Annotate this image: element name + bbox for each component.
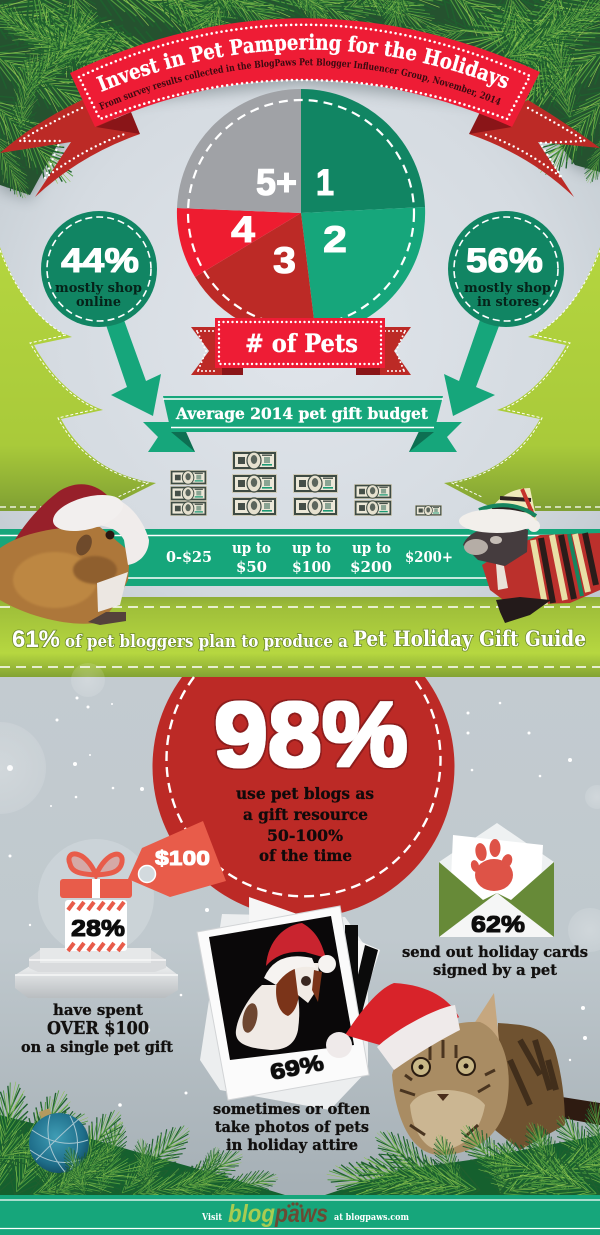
photo stack: 69%: 69% [268, 1050, 326, 1085]
banner: average budget: Average 2014 pet gift budget [175, 404, 428, 423]
banner: number of pets: # of Pets [245, 329, 358, 358]
sweater [482, 533, 600, 605]
pedestal [15, 948, 178, 998]
footer band: at blogpaws.com [334, 1213, 409, 1223]
big circle: 98% pet blogs: 50-100% [267, 826, 343, 845]
money up to $100 [293, 474, 338, 516]
ribbon tails [0, 100, 600, 197]
pie labels: 3 [273, 240, 296, 281]
lower background [0, 677, 600, 1197]
callout: 44% online [41, 211, 157, 327]
pie labels [231, 162, 347, 281]
ornament [29, 1108, 122, 1205]
budget band: $200+ [405, 548, 453, 566]
green tree left [0, 247, 156, 511]
slice: 2 pets [301, 207, 425, 336]
budget band: $200 [350, 558, 392, 576]
pie labels: 4 [231, 209, 255, 250]
logo: blogpaws [228, 1200, 328, 1228]
ferret in sweater [459, 488, 600, 623]
budget band: up to [352, 539, 391, 557]
budget band: $100 [292, 558, 331, 576]
callout: 44% online: mostly shop [55, 281, 142, 296]
subtitle: From survey results collected in the BlogPaws Pet Blogger Influencer Group, November, 2014 [98, 58, 501, 110]
gift guide band: 61% [12, 626, 60, 653]
banner: average budget [143, 396, 462, 452]
budget band: up to [232, 539, 271, 557]
footer band: Visit [201, 1213, 222, 1223]
legs [496, 597, 551, 623]
footer band [0, 1195, 600, 1235]
callout: 56% in stores: in stores [477, 295, 539, 310]
slice: 4 pets [177, 208, 301, 277]
bottom pine right [323, 1099, 600, 1216]
dog in santa hat [236, 923, 336, 1050]
big circle: 98% pet blogs [152, 677, 454, 918]
big circle: 98% pet blogs: a gift resource [243, 805, 368, 824]
caption: holiday photos: sometimes or often [213, 1100, 370, 1118]
card stat: 62%: send out holiday cards [402, 943, 588, 961]
green tree right [444, 247, 600, 511]
callout: 56% in stores [448, 211, 564, 327]
gift guide band: Pet Holiday Gift Guide [353, 626, 586, 651]
gift guide band: of pet bloggers plan to produce a [65, 632, 348, 652]
pie labels: 5+ [256, 162, 297, 203]
top pine branches [0, 0, 600, 204]
bokeh and snow [0, 663, 600, 1107]
gift stat: 28% [15, 821, 226, 1056]
santa hat [345, 983, 459, 1070]
big circle: 98% pet blogs: 98% [214, 684, 408, 786]
money 0-$25 [170, 470, 207, 516]
caption: holiday photos: in holiday attire [226, 1136, 358, 1154]
pie labels: 2 [323, 219, 347, 260]
caption: over $100 [21, 1001, 174, 1056]
money $200+ [415, 505, 442, 516]
upper background [0, 0, 600, 600]
striped hat [490, 488, 537, 522]
photo stack: 69% [197, 897, 380, 1110]
budget band: $50 [236, 558, 267, 576]
card stat: 62% [402, 823, 588, 979]
price tag: $100 [155, 848, 210, 870]
body [0, 527, 130, 624]
card stat: 62%: 62% [471, 911, 525, 937]
gift guide band [0, 597, 600, 677]
logo: blogpaws: paws [274, 1200, 328, 1228]
banner: number of pets [191, 318, 411, 375]
pie labels: 1 [316, 162, 334, 203]
title: Invest in Pet Pampering for the Holidays [96, 33, 509, 92]
big circle: 98% pet blogs: of the time [259, 846, 352, 865]
price tag [128, 821, 226, 897]
gift box: 28% [71, 915, 125, 941]
guinea pig in santa hat [0, 484, 149, 625]
gift box [60, 854, 132, 951]
money up to $50 [232, 451, 277, 516]
slice: 3 pets [195, 213, 316, 337]
callout: 56% in stores: mostly shop [464, 281, 551, 296]
budget band: up to [292, 539, 331, 557]
money up to $200 [354, 484, 392, 516]
callout: 44% online: 44% [61, 242, 139, 280]
budget band: 0-$25 [166, 548, 212, 566]
money stacks [170, 451, 442, 516]
big circle: 98% pet blogs: use pet blogs as [236, 784, 374, 803]
santa hat [0, 484, 108, 568]
slice: 1 pet [301, 89, 425, 213]
caption: holiday photos [213, 1100, 370, 1154]
budget band [0, 529, 600, 586]
white face and hat brim [90, 498, 149, 565]
caption: holiday photos: take photos of pets [215, 1118, 369, 1136]
icon: paw print [470, 839, 514, 891]
slice: 5+ pets [177, 89, 301, 213]
caption: over $100: have spent [53, 1001, 144, 1019]
callout: 56% in stores: 56% [466, 242, 543, 280]
callout: 44% online: online [76, 295, 121, 310]
cat in santa hat [326, 983, 600, 1155]
caption: over $100: OVER $100 [47, 1018, 149, 1039]
title ribbon [70, 18, 540, 127]
arrow right [444, 320, 499, 416]
card stat: 62%: signed by a pet [433, 961, 558, 979]
arrow left [106, 320, 161, 416]
logo: blogpaws: blog [228, 1200, 275, 1228]
pie chart: number of pets [177, 89, 425, 337]
head [463, 526, 528, 566]
bottom pine left [0, 1078, 285, 1214]
caption: over $100: on a single pet gift [21, 1038, 174, 1056]
